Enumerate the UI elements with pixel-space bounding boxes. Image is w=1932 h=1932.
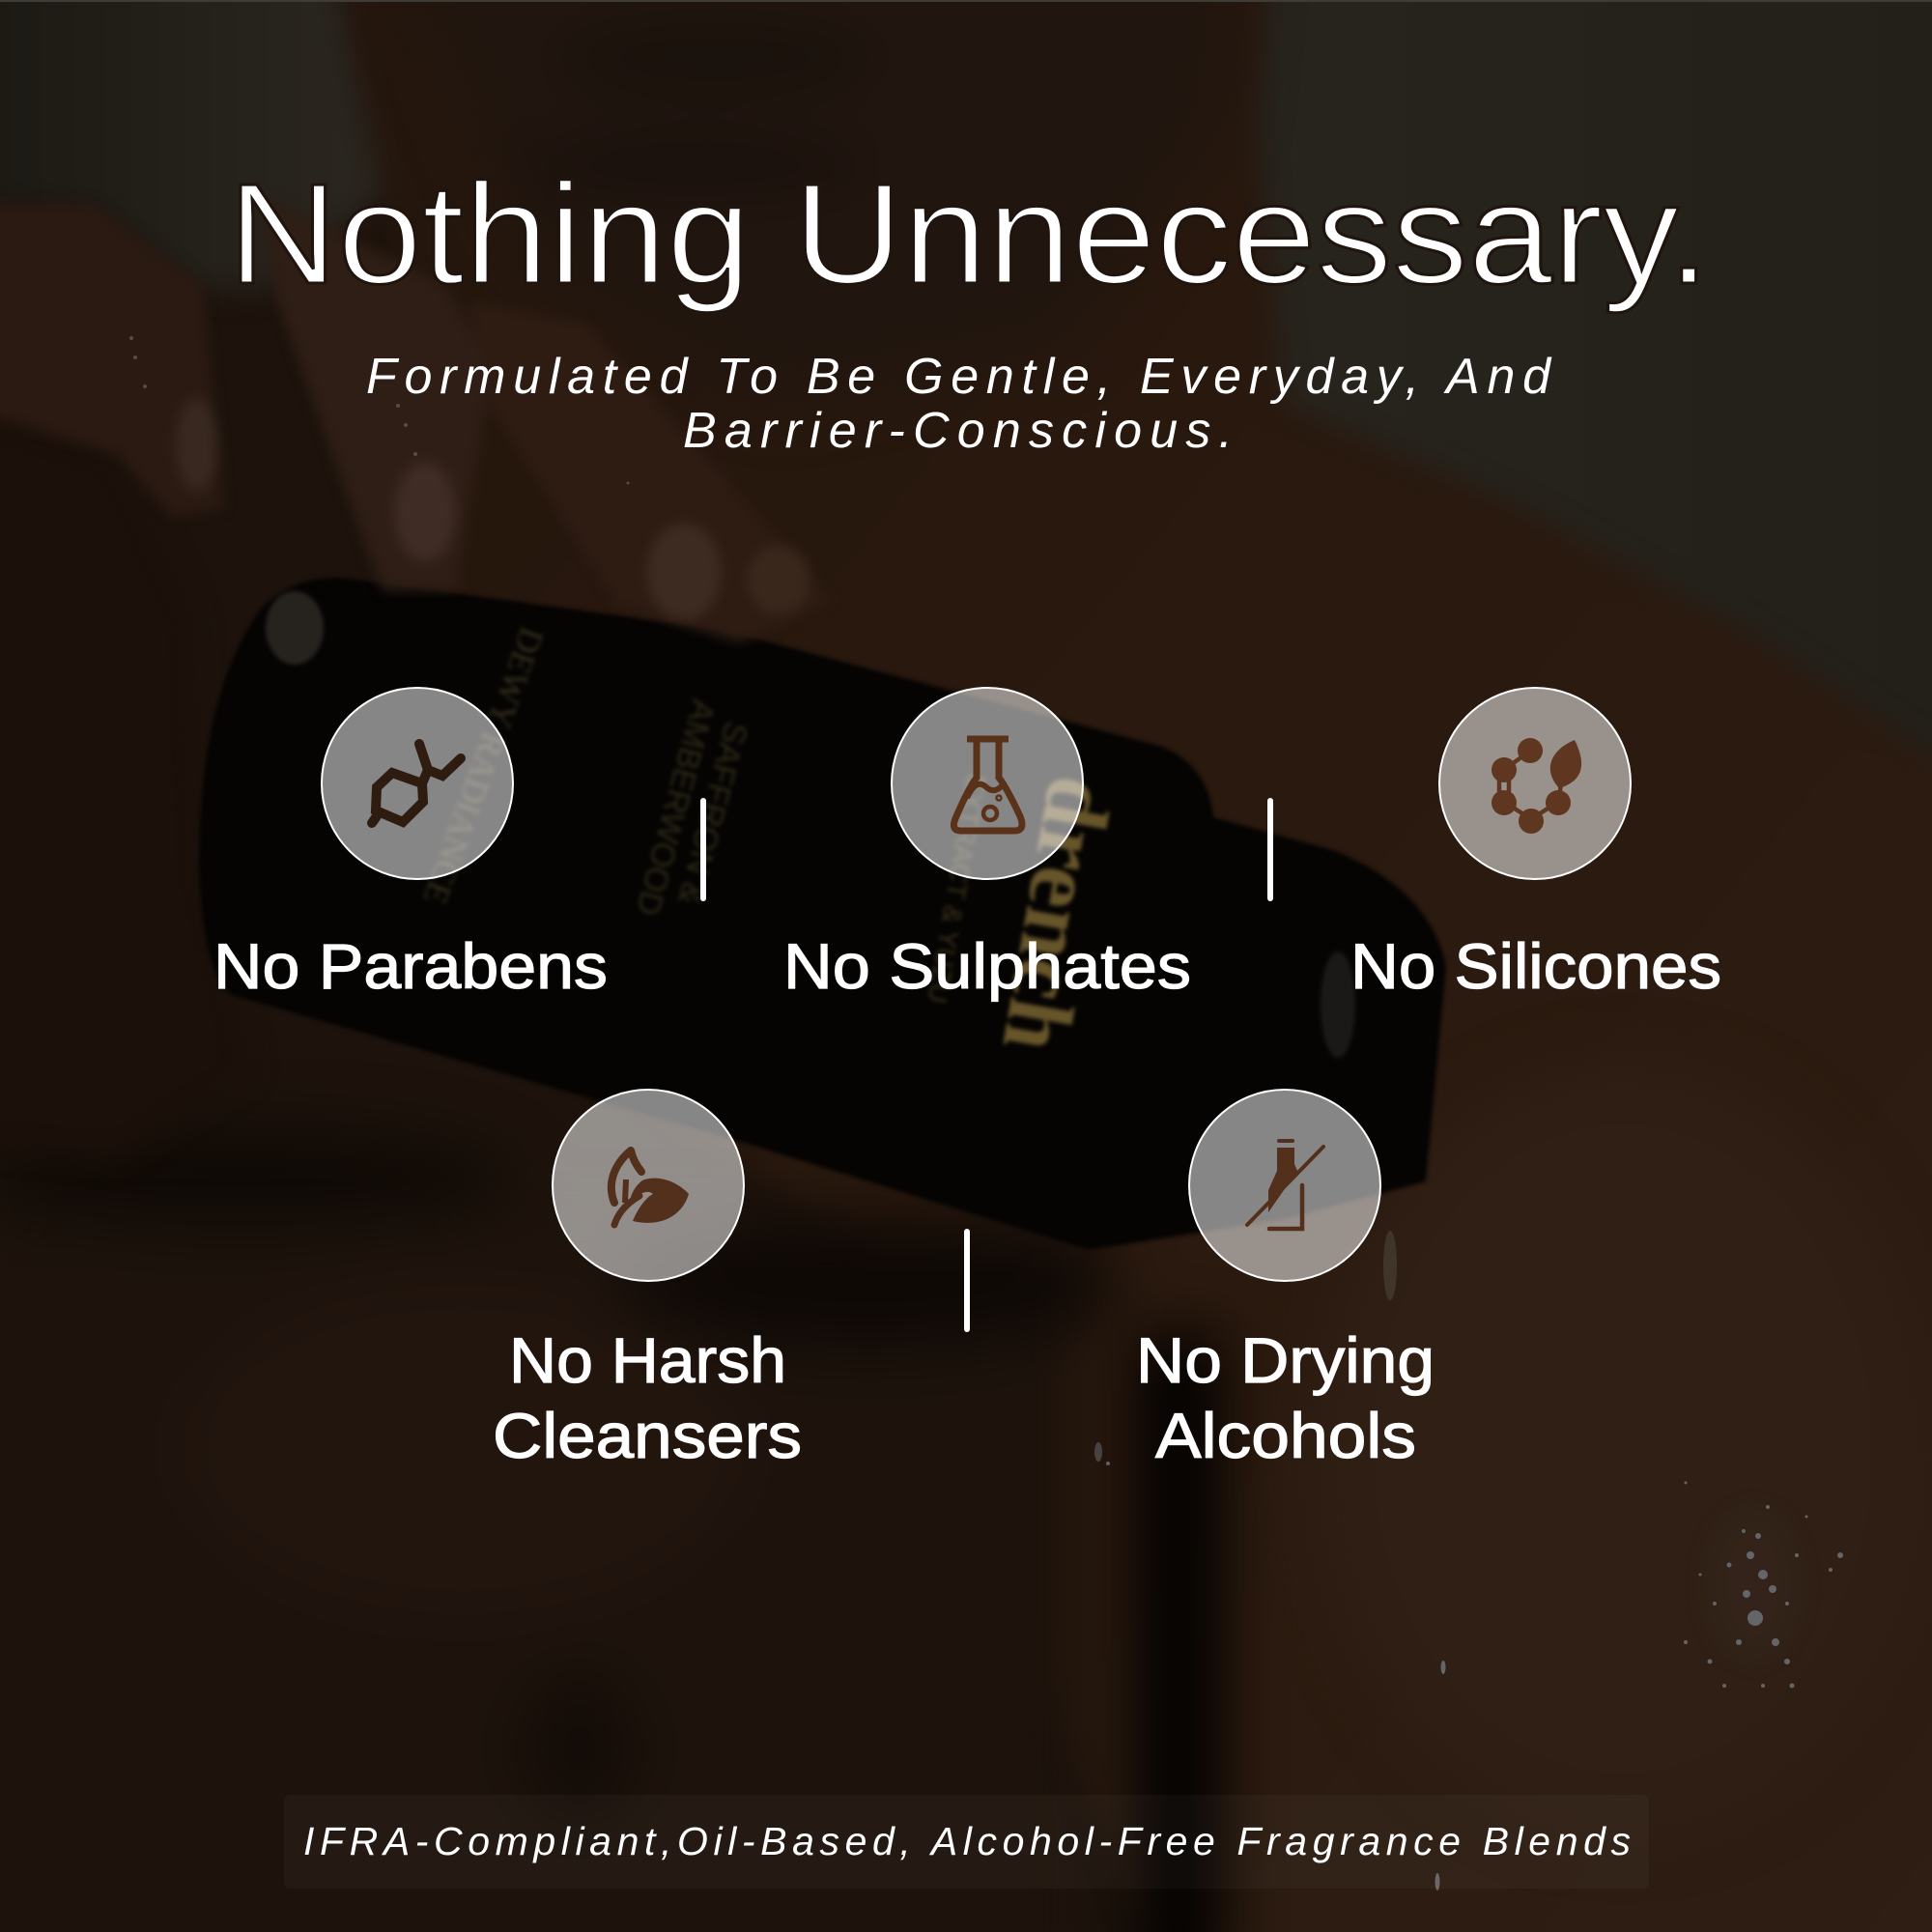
label: no silicones: No Silicones xyxy=(1350,930,1721,1002)
title: Nothing Unnecessary. xyxy=(228,155,1710,314)
icon: crossed-out bottle xyxy=(1247,1139,1323,1229)
divider xyxy=(700,798,706,901)
bottle xyxy=(199,578,1446,1250)
label: no drying alcohols: No Drying xyxy=(1136,1324,1435,1396)
bottle: DEWY RADIANCE xyxy=(415,622,552,909)
water droplet xyxy=(1383,1231,1397,1300)
icon: molecule with leaf xyxy=(1492,738,1581,834)
icon: flask xyxy=(953,739,1022,831)
bottle: EXTRACT & YUZU xyxy=(922,772,992,1006)
water sparkle xyxy=(1094,1442,1843,1890)
item: no drying alcohols xyxy=(1189,1090,1380,1281)
label: no harsh cleansers xyxy=(493,1324,802,1471)
item: no parabens xyxy=(322,688,513,879)
fingers xyxy=(0,193,832,642)
item: no harsh cleansers xyxy=(553,1090,744,1281)
subtitle: Formulated To Be Gentle, Everyday, And xyxy=(366,349,1552,405)
bottle: AMBERWOOD xyxy=(629,696,722,920)
subtitle xyxy=(366,349,1552,459)
label: no harsh cleansers: No Harsh xyxy=(509,1324,786,1396)
label: no drying alcohols xyxy=(1136,1324,1435,1471)
label: no harsh cleansers: Cleansers xyxy=(493,1400,802,1471)
item: no sulphates xyxy=(892,688,1083,879)
divider xyxy=(1267,798,1273,901)
subtitle: Barrier-Conscious. xyxy=(683,403,1233,459)
item: no silicones xyxy=(1439,688,1631,879)
icon: molecule xyxy=(372,744,461,823)
bottle: drench xyxy=(983,769,1133,1060)
label: no drying alcohols: Alcohols xyxy=(1155,1400,1416,1471)
footer note xyxy=(284,1795,1649,1889)
divider xyxy=(964,1229,970,1332)
icon: leaves xyxy=(611,1151,689,1225)
label: no sulphates: No Sulphates xyxy=(783,930,1191,1002)
footer note: IFRA-Compliant,Oil-Based, Alcohol-Free Fragrance Blends xyxy=(303,1819,1631,1863)
bottle: SAFFRON & xyxy=(670,718,754,909)
label: no parabens: No Parabens xyxy=(213,930,608,1002)
